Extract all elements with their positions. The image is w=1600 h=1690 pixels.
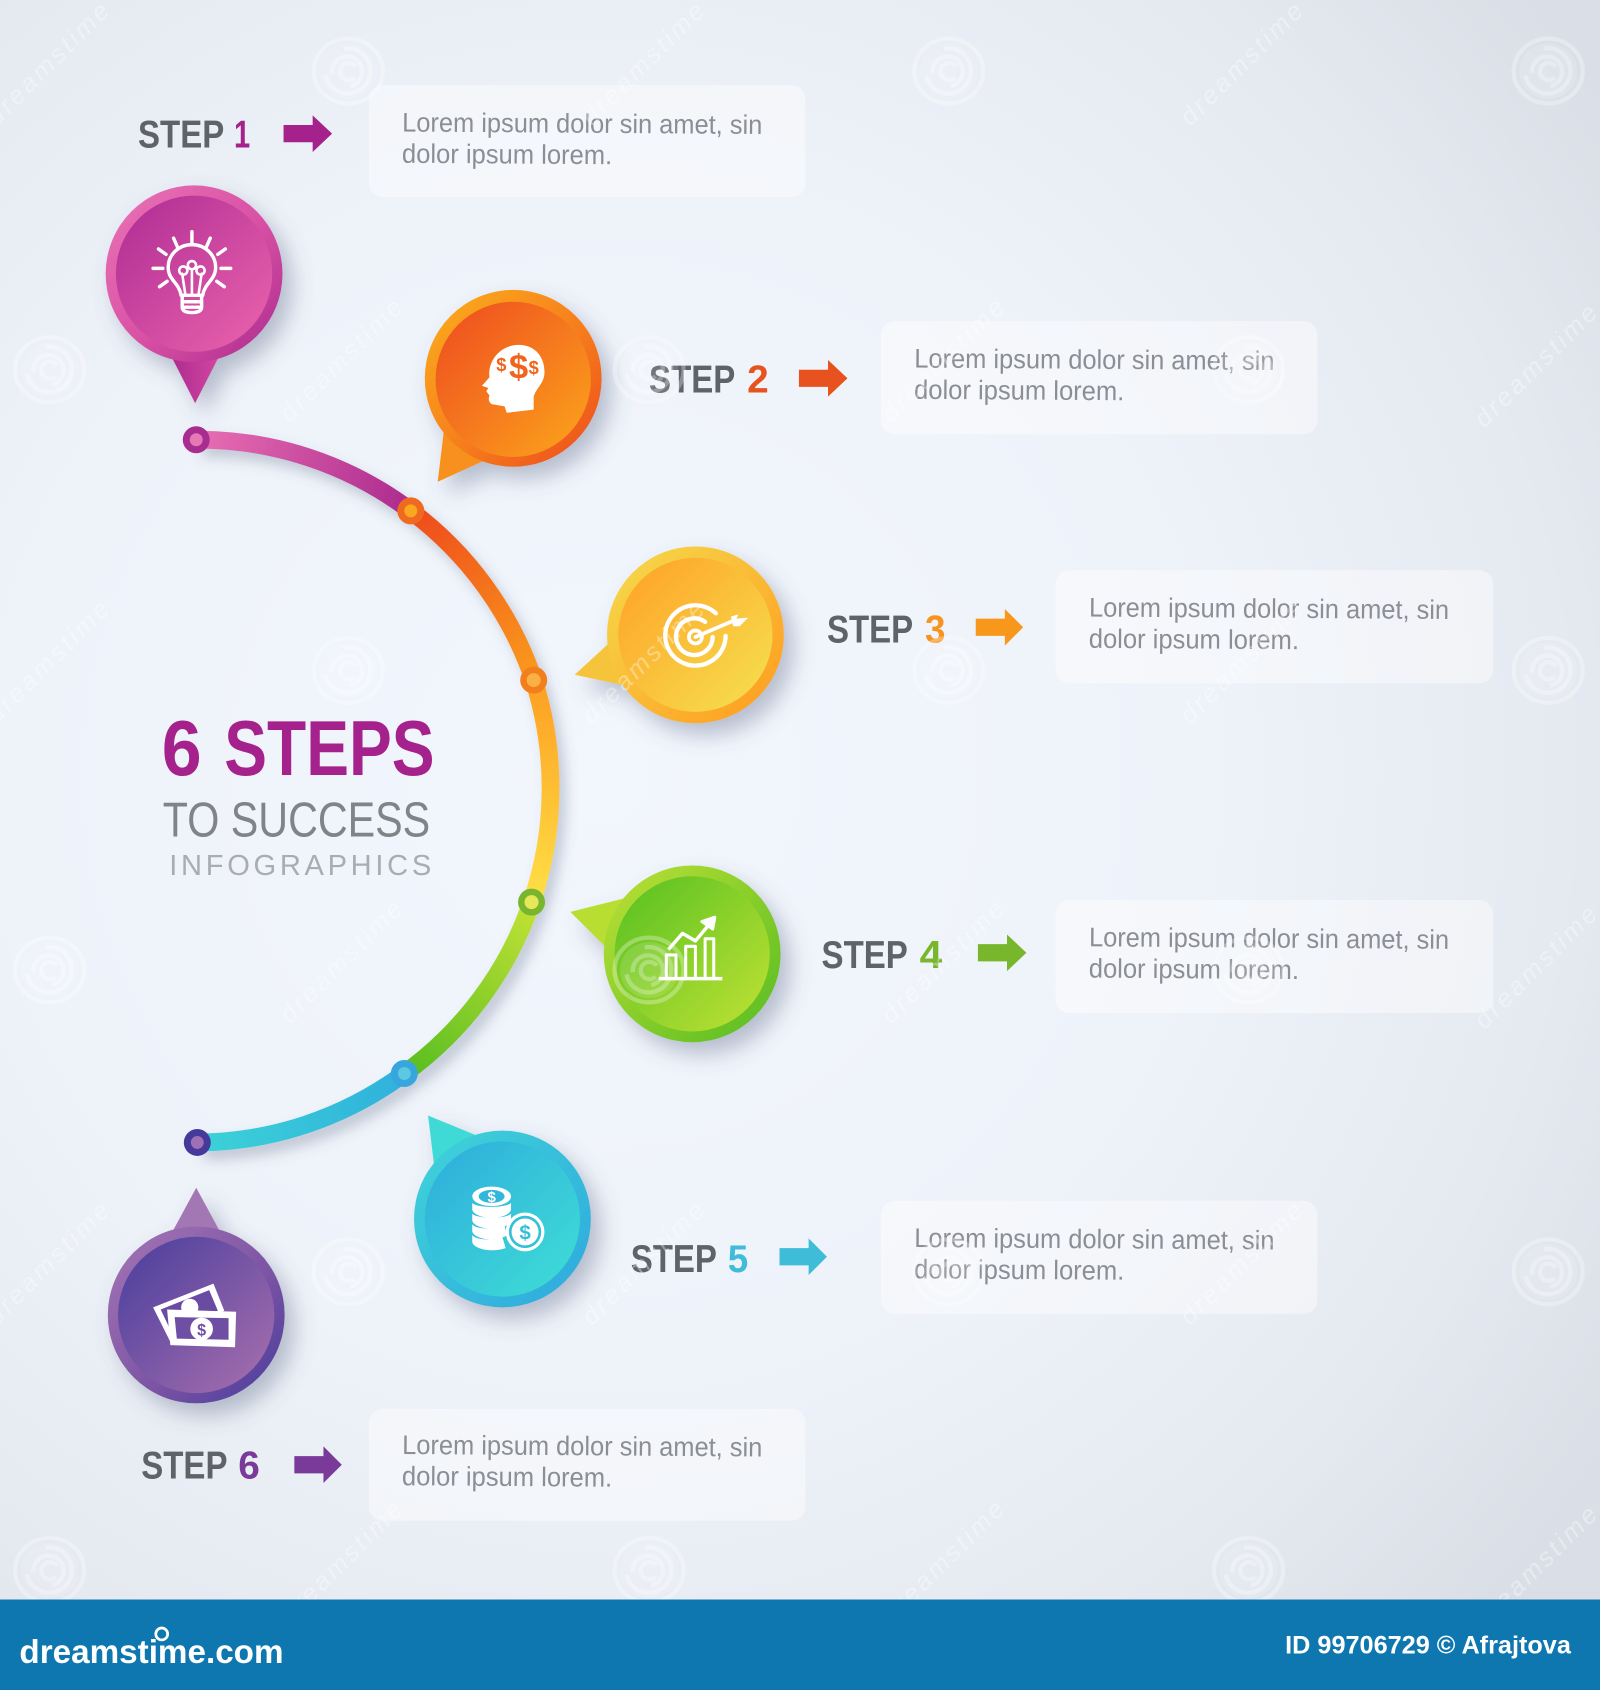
text box: step 2 bbox=[881, 321, 1318, 434]
icon: coin stack: $ bbox=[519, 1221, 531, 1244]
watermark overlay: dreamstime bbox=[876, 1495, 1010, 1630]
text box: step 5: Lorem ipsum dolor sin amet, sin bbox=[914, 1223, 1275, 1256]
icon: head with dollar signs bbox=[482, 345, 544, 413]
text box: step 2: dolor ipsum lorem. bbox=[914, 375, 1124, 406]
watermark overlay: dreamstime bbox=[1469, 299, 1600, 433]
text box: step 5 bbox=[881, 1201, 1318, 1314]
text box: step 6 bbox=[369, 1409, 805, 1521]
step 6 label: STEP bbox=[141, 1445, 227, 1488]
title: 6 bbox=[162, 706, 202, 792]
step 1 label: 1 bbox=[234, 114, 250, 157]
node: step 3 bbox=[520, 667, 547, 694]
title: STEPS bbox=[224, 706, 435, 792]
text box: step 6: dolor ipsum lorem. bbox=[402, 1461, 612, 1493]
title: INFOGRAPHICS bbox=[169, 850, 431, 882]
watermark overlay: dreamstime bbox=[1175, 1197, 1309, 1331]
arrow: step 6 bbox=[294, 1446, 342, 1483]
step 2 label: 2 bbox=[747, 358, 769, 401]
central arc timeline bbox=[183, 426, 551, 1156]
pin 3: target bbox=[575, 546, 784, 723]
pin 6: banknotes bbox=[108, 1188, 285, 1403]
text box: step 3: dolor ipsum lorem. bbox=[1089, 624, 1299, 655]
pin 5: coins bbox=[414, 1116, 591, 1307]
step 2 label: STEP bbox=[649, 358, 735, 401]
icon: coin stack bbox=[472, 1187, 544, 1251]
text box: step 1: Lorem ipsum dolor sin amet, sin bbox=[402, 107, 762, 140]
icon: light bulb bbox=[153, 232, 231, 313]
watermark overlay: dreamstime bbox=[274, 895, 409, 1029]
watermark overlay: dreamstime bbox=[274, 1495, 409, 1630]
node: end bbox=[184, 1129, 211, 1156]
node: step 2 bbox=[397, 497, 424, 524]
step 6 label: 6 bbox=[238, 1445, 260, 1488]
icon: banknotes bbox=[153, 1284, 236, 1347]
arrow: step 3 bbox=[976, 609, 1023, 646]
step 5 label: STEP bbox=[631, 1238, 717, 1281]
icon: banknotes: $ bbox=[197, 1321, 206, 1339]
pin 1: idea bbox=[106, 185, 282, 403]
icon: bar chart with arrow bbox=[659, 917, 722, 979]
watermark overlay: dreamstime bbox=[876, 895, 1010, 1029]
step 4 label: 4 bbox=[920, 934, 943, 977]
watermark overlay: dreamstime bbox=[576, 1197, 710, 1331]
watermark overlay: dreamstime bbox=[876, 294, 1010, 428]
watermark overlay: dreamstime bbox=[1469, 1501, 1600, 1635]
arrow: step 2 bbox=[799, 360, 847, 397]
dreamstime logo: dreamstime.com bbox=[19, 1634, 284, 1671]
icon: head with dollar signs: $ bbox=[529, 357, 539, 378]
node: start bbox=[183, 426, 210, 453]
title bbox=[162, 706, 435, 882]
title: TO SUCCESS bbox=[163, 791, 430, 847]
text box: step 6: Lorem ipsum dolor sin amet, sin bbox=[402, 1430, 762, 1462]
pin 2: money mindset bbox=[425, 290, 602, 482]
watermark overlay: dreamstime bbox=[576, 0, 710, 131]
pin 4: growth chart bbox=[570, 865, 781, 1042]
step 5 label: 5 bbox=[728, 1238, 748, 1281]
arrow: step 4 bbox=[978, 934, 1026, 971]
text box: step 3 bbox=[1056, 570, 1493, 683]
icon: coin stack: $ bbox=[487, 1189, 496, 1206]
image credit: ID 99706729 © Afrajtova bbox=[1285, 1632, 1571, 1659]
icon: target with arrow bbox=[665, 605, 748, 666]
arrow: step 5 bbox=[780, 1238, 827, 1275]
text box: step 3: Lorem ipsum dolor sin amet, sin bbox=[1089, 593, 1449, 625]
arrow: step 1 bbox=[284, 115, 332, 152]
text box: step 4 bbox=[1056, 900, 1493, 1013]
text box: step 1: dolor ipsum lorem. bbox=[402, 139, 612, 170]
step 4 label: STEP bbox=[822, 934, 908, 977]
watermark overlay: dreamstime bbox=[274, 294, 409, 428]
node: step 4 bbox=[518, 889, 545, 916]
text box: step 1 bbox=[369, 85, 805, 197]
watermark overlay: dreamstime bbox=[1175, 0, 1309, 131]
watermark overlay: dreamstime bbox=[1469, 901, 1600, 1035]
watermark overlay: dreamstime bbox=[1175, 596, 1309, 730]
step 3 label: 3 bbox=[925, 608, 946, 651]
icon: head with dollar signs: $ bbox=[509, 348, 528, 386]
step 3 label: STEP bbox=[827, 608, 913, 651]
text box: step 4: dolor ipsum lorem. bbox=[1089, 954, 1299, 985]
text box: step 4: Lorem ipsum dolor sin amet, sin bbox=[1089, 922, 1449, 955]
step 1 label: STEP bbox=[138, 114, 224, 157]
watermark overlay: dreamstime bbox=[576, 596, 710, 730]
icon: head with dollar signs: $ bbox=[496, 354, 506, 375]
node: step 5 bbox=[391, 1060, 418, 1087]
text box: step 5: dolor ipsum lorem. bbox=[914, 1254, 1124, 1286]
text box: step 2: Lorem ipsum dolor sin amet, sin bbox=[914, 344, 1275, 376]
footer banner bbox=[0, 1599, 1600, 1690]
